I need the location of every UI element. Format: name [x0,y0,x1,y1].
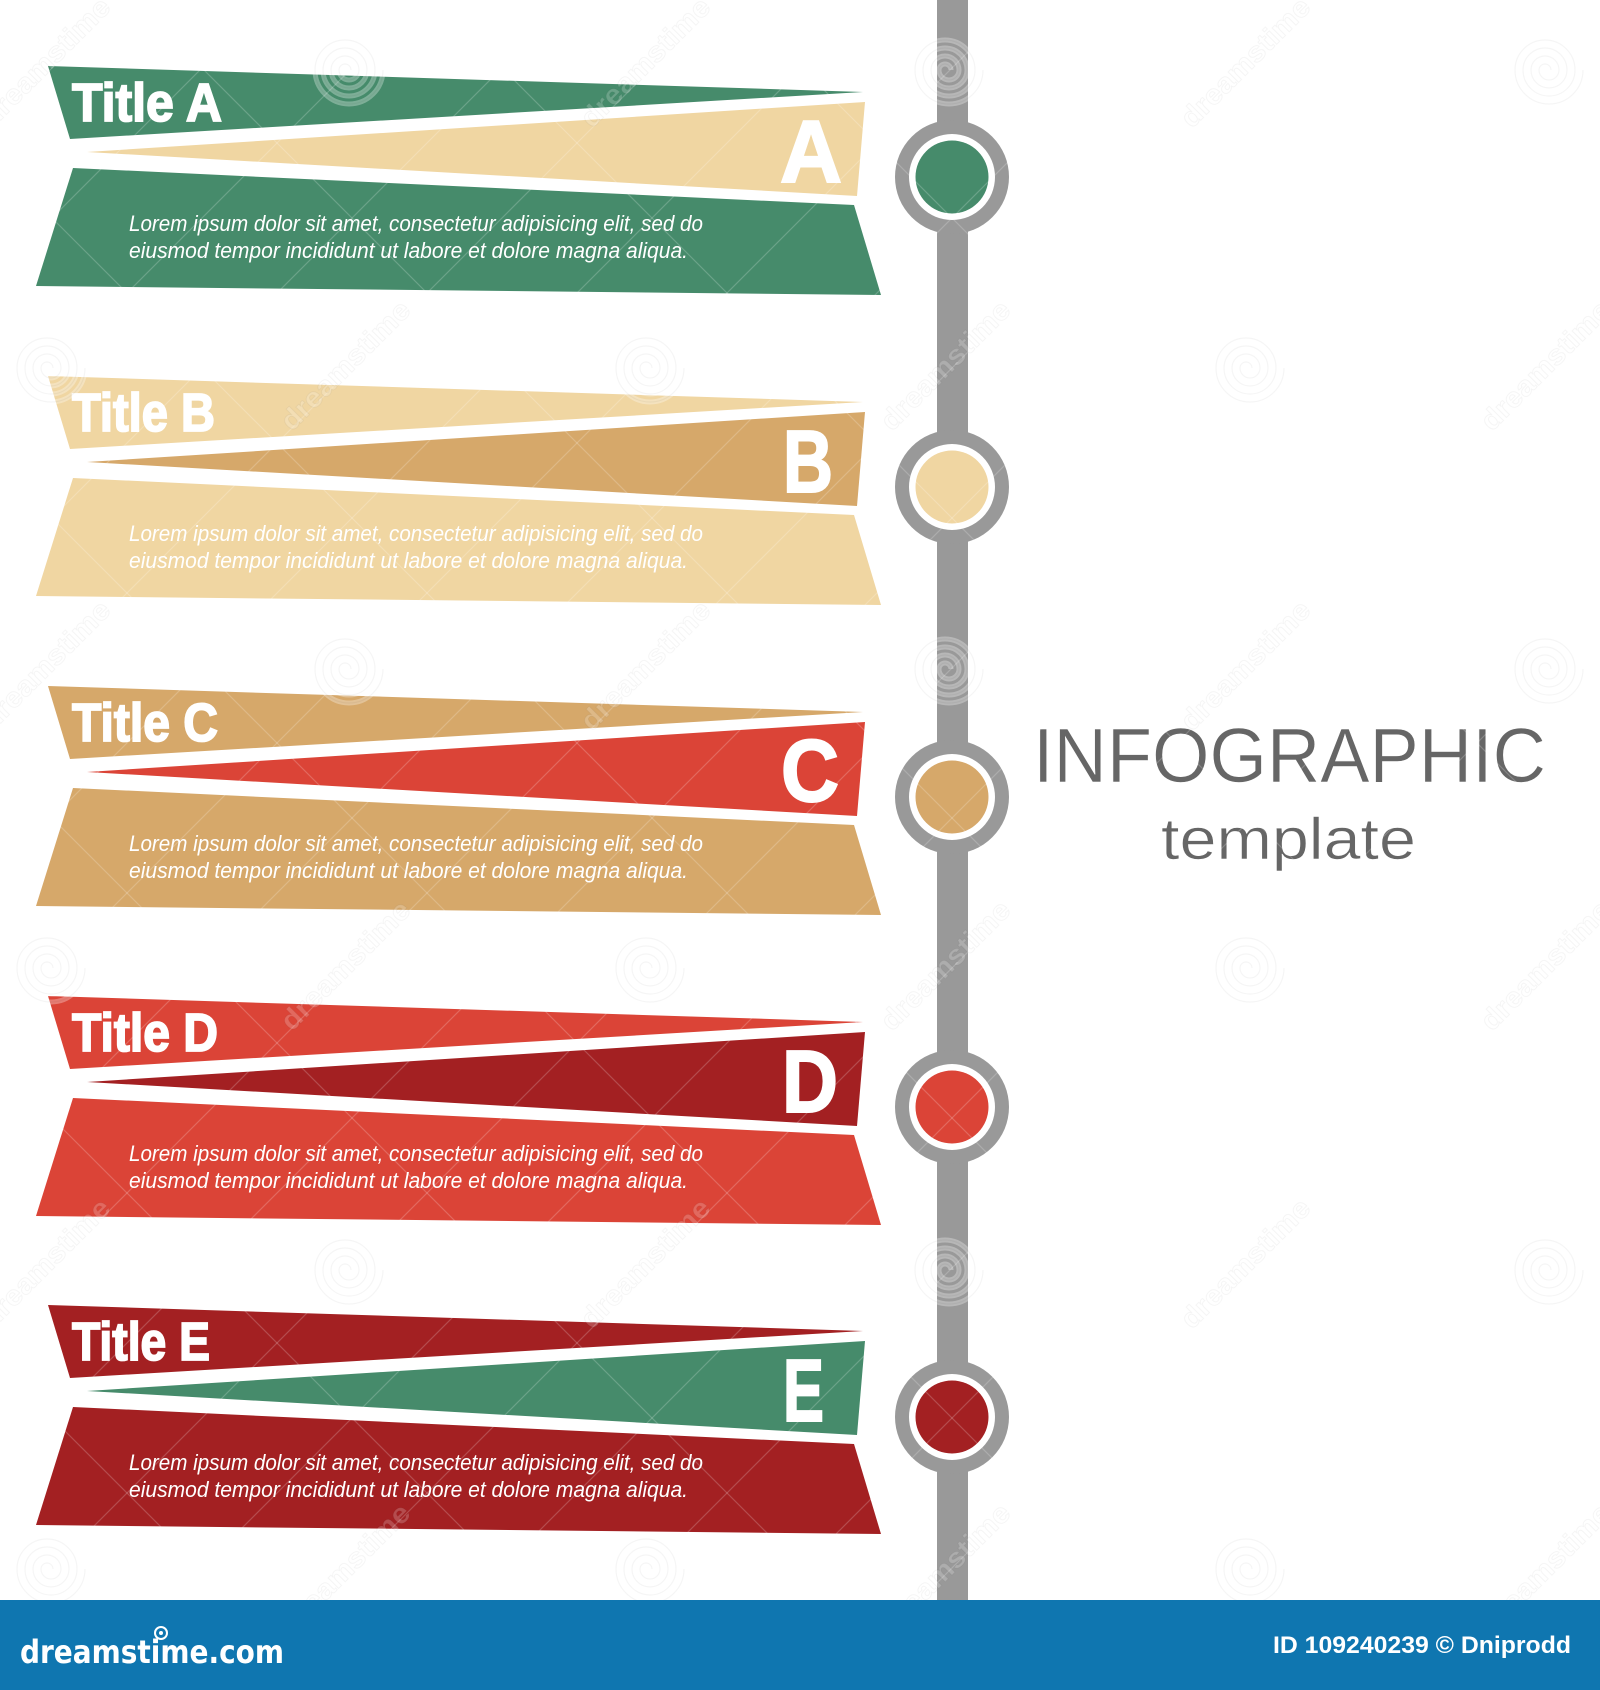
main title: INFOGRAPHIC [1033,713,1546,799]
text: dreamstime [1174,1192,1316,1334]
heading: Title D: Title D [72,1003,218,1063]
heading: Title C: Title C [72,693,218,753]
body text A [129,211,703,263]
title band E [48,1305,863,1378]
title band C [48,686,863,759]
body text B: Lorem ipsum dolor sit amet, consectetur adipisicing elit, sed do [129,521,703,546]
body text E: eiusmod tempor incididunt ut labore et dolore magna aliqua. [129,1477,688,1502]
row C [36,686,881,915]
timeline node A [895,120,1009,234]
body text A: Lorem ipsum dolor sit amet, consectetur adipisicing elit, sed do [129,211,703,236]
heading: Title B: Title B [72,383,215,443]
letter band A [87,102,865,196]
subtitle: template [1161,807,1416,872]
title band A [48,66,863,139]
text: dreamstime [874,294,1016,436]
body text B [129,521,703,573]
title band D [48,996,863,1069]
timeline node B [895,430,1009,544]
body text A: eiusmod tempor incididunt ut labore et dolore magna aliqua. [129,238,688,263]
body text E [129,1450,703,1502]
text: dreamstime [274,894,416,1036]
big letter E: E [783,1341,824,1440]
text: dreamstime [574,1192,716,1334]
text: dreamstime [874,894,1016,1036]
footer bar [0,1600,1600,1690]
row D [36,996,881,1225]
body text B: eiusmod tempor incididunt ut labore et dolore magna aliqua. [129,548,688,573]
letter band E [87,1341,865,1435]
body text D: Lorem ipsum dolor sit amet, consectetur adipisicing elit, sed do [129,1141,703,1166]
body text C [129,831,703,883]
row E [36,1305,881,1534]
timeline node E [895,1360,1009,1474]
letter band D [87,1032,865,1126]
text: dreamstime [274,1497,416,1639]
body text C: eiusmod tempor incididunt ut labore et dolore magna aliqua. [129,858,688,883]
text: dreamstime [1174,0,1316,133]
text: dreamstime [274,294,416,436]
title band B [48,376,863,449]
heading: Title A: Title A [72,73,222,133]
timeline node C [895,740,1009,854]
text panel A [36,168,881,295]
heading: Title E: Title E [72,1312,210,1372]
timeline node D [895,1050,1009,1164]
big letter D: D [782,1032,838,1131]
text panel B [36,478,881,605]
text panel E [36,1407,881,1534]
text panel C [36,788,881,915]
footer logo: dreamstime.com [20,1633,284,1671]
timeline rail [937,0,968,1600]
footer image id: ID 109240239 © Dniprodd [1273,1632,1571,1659]
big letter C: C [781,721,839,820]
text: dreamstime [574,594,716,736]
big letter A: A [780,102,842,201]
body text E: Lorem ipsum dolor sit amet, consectetur adipisicing elit, sed do [129,1450,703,1475]
letter band C [87,722,865,816]
big letter B: B [783,412,833,511]
row A [36,66,881,295]
row B [36,376,881,605]
text: dreamstime [574,0,716,133]
body text C: Lorem ipsum dolor sit amet, consectetur adipisicing elit, sed do [129,831,703,856]
text: dreamstime [1174,594,1316,736]
text panel D [36,1098,881,1225]
body text D: eiusmod tempor incididunt ut labore et dolore magna aliqua. [129,1168,688,1193]
body text D [129,1141,703,1193]
letter band B [87,412,865,506]
text: dreamstime [874,1497,1016,1639]
